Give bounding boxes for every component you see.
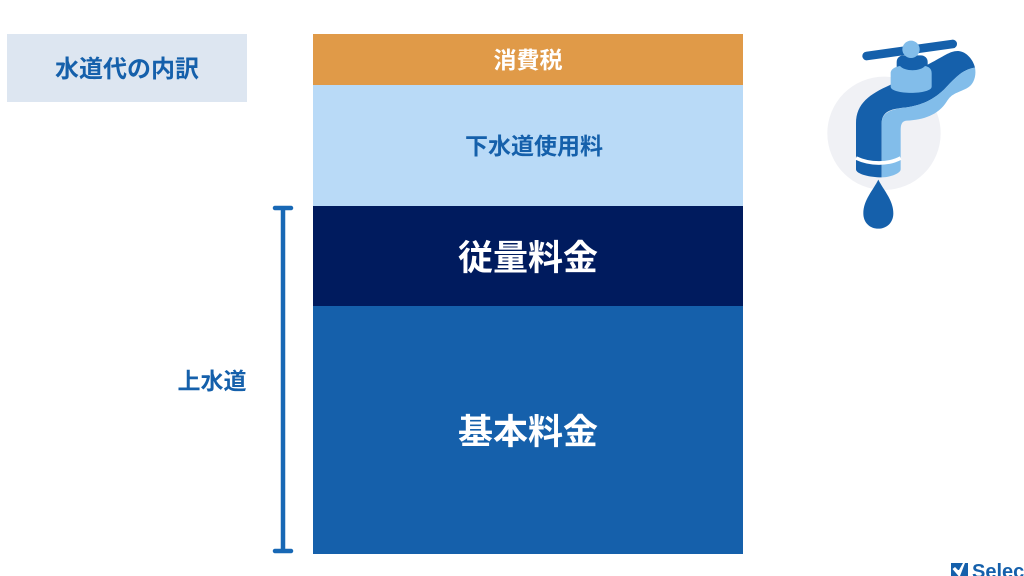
heading: water bill breakdown bbox=[7, 34, 247, 102]
heading: water bill breakdown: 水道代の内訳 bbox=[55, 56, 199, 82]
stacked block: base fee bbox=[313, 306, 743, 554]
stacked block: consumption tax bbox=[313, 34, 743, 85]
stacked block: metered fee: 従量料金 bbox=[458, 238, 598, 278]
stacked block: consumption tax: 消費税 bbox=[494, 46, 562, 72]
stacked block: base fee: 基本料金 bbox=[458, 412, 598, 452]
icon: dripping faucet bbox=[828, 40, 976, 229]
label: water supply: 上水道 bbox=[178, 368, 246, 394]
bracket: water supply range bbox=[272, 206, 294, 554]
stacked block: metered fee bbox=[313, 206, 743, 306]
stacked block: sewerage fee bbox=[313, 85, 743, 206]
stacked block: sewerage fee: 下水道使用料 bbox=[465, 132, 603, 158]
